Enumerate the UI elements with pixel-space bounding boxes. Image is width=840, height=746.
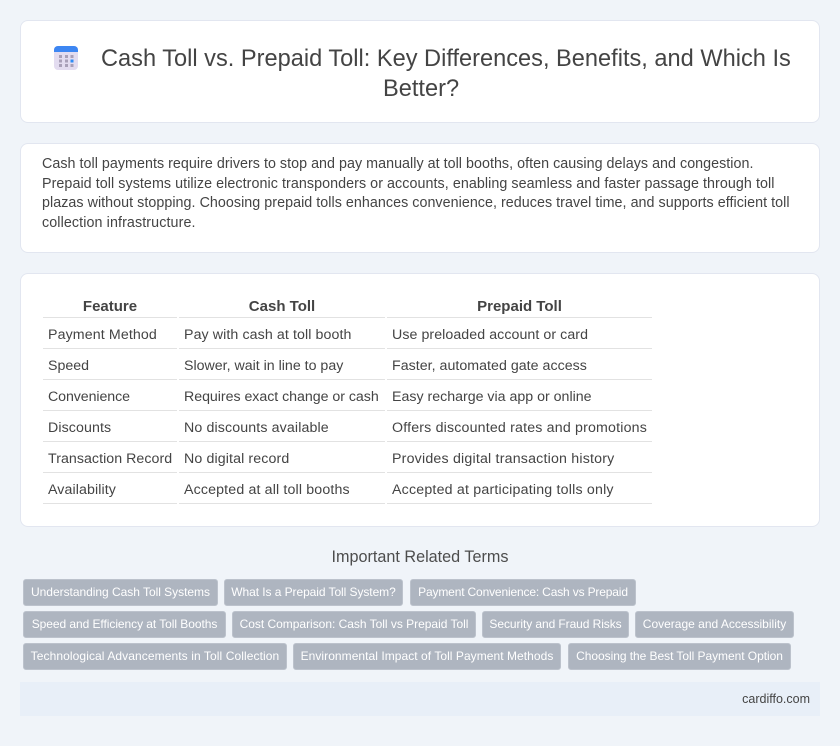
comparison table: Accepted at all toll booths bbox=[184, 482, 350, 498]
tags: related terms: Choosing the Best Toll Payment Option bbox=[576, 649, 783, 663]
comparison table: No discounts available bbox=[184, 420, 329, 436]
heading: related terms: Important Related Terms bbox=[332, 548, 508, 566]
tags: related terms: What Is a Prepaid Toll System? bbox=[231, 585, 396, 599]
comparison table: No digital record bbox=[184, 451, 289, 467]
intro text: collection infrastructure. bbox=[42, 214, 196, 230]
tags: related terms: Technological Advancements in Toll Collection bbox=[31, 649, 279, 663]
footer credit: cardiffo.com bbox=[742, 692, 810, 706]
panel: intro card bbox=[20, 143, 820, 253]
intro text bbox=[42, 156, 790, 230]
comparison table: Use preloaded account or card bbox=[392, 327, 588, 343]
comparison table: Availability bbox=[48, 482, 116, 498]
tags: related terms bbox=[23, 579, 794, 670]
comparison table: Payment Method bbox=[48, 327, 157, 343]
comparison table bbox=[43, 298, 652, 504]
comparison table: Convenience bbox=[48, 389, 130, 405]
comparison table: Pay with cash at toll booth bbox=[184, 327, 352, 343]
tags: related terms: Cost Comparison: Cash Toll vs Prepaid Toll bbox=[240, 617, 468, 631]
comparison table: Provides digital transaction history bbox=[392, 451, 614, 467]
header: Feature: Feature bbox=[83, 298, 137, 315]
tags: related terms: Understanding Cash Toll Systems bbox=[31, 585, 210, 599]
footer bbox=[20, 682, 820, 716]
comparison table: Cash Toll bbox=[249, 298, 315, 315]
comparison table: Requires exact change or cash bbox=[184, 389, 379, 405]
comparison table: Slower, wait in line to pay bbox=[184, 358, 343, 374]
tags: related terms: Coverage and Accessibility bbox=[643, 617, 786, 631]
comparison table: Faster, automated gate access bbox=[392, 358, 587, 374]
tags: related terms: Security and Fraud Risks bbox=[489, 617, 622, 631]
panel: table card bbox=[20, 273, 820, 527]
tags: related terms: Speed and Efficiency at Toll Booths bbox=[32, 617, 217, 631]
icon: calendar bbox=[54, 46, 78, 70]
comparison table: Offers discounted rates and promotions bbox=[392, 420, 647, 436]
title bbox=[101, 46, 791, 102]
comparison table: Accepted at participating tolls only bbox=[392, 482, 614, 498]
panel: title card bbox=[20, 20, 820, 123]
title: Cash Toll vs. Prepaid Toll: Key Differences, Benefits, and Which Is bbox=[101, 46, 791, 72]
tags: related terms: Environmental Impact of Toll Payment Methods bbox=[301, 649, 553, 663]
comparison table: Transaction Record bbox=[48, 451, 172, 467]
comparison table: Speed bbox=[48, 358, 89, 374]
comparison table: Easy recharge via app or online bbox=[392, 389, 592, 405]
title: Better? bbox=[383, 76, 459, 102]
comparison table: Prepaid Toll bbox=[477, 298, 562, 315]
tags: related terms: Payment Convenience: Cash vs Prepaid bbox=[418, 585, 628, 599]
comparison table: Discounts bbox=[48, 420, 111, 436]
intro text: plazas without stopping. Choosing prepaid tolls enhances convenience, reduces travel time, and supports efficient toll bbox=[42, 195, 790, 211]
intro text: Cash toll payments require drivers to stop and pay manually at toll booths, often causing delays and congestion. bbox=[42, 156, 753, 172]
intro text: Prepaid toll systems utilize electronic transponders or accounts, enabling seamless and faster passage through toll bbox=[42, 176, 774, 192]
